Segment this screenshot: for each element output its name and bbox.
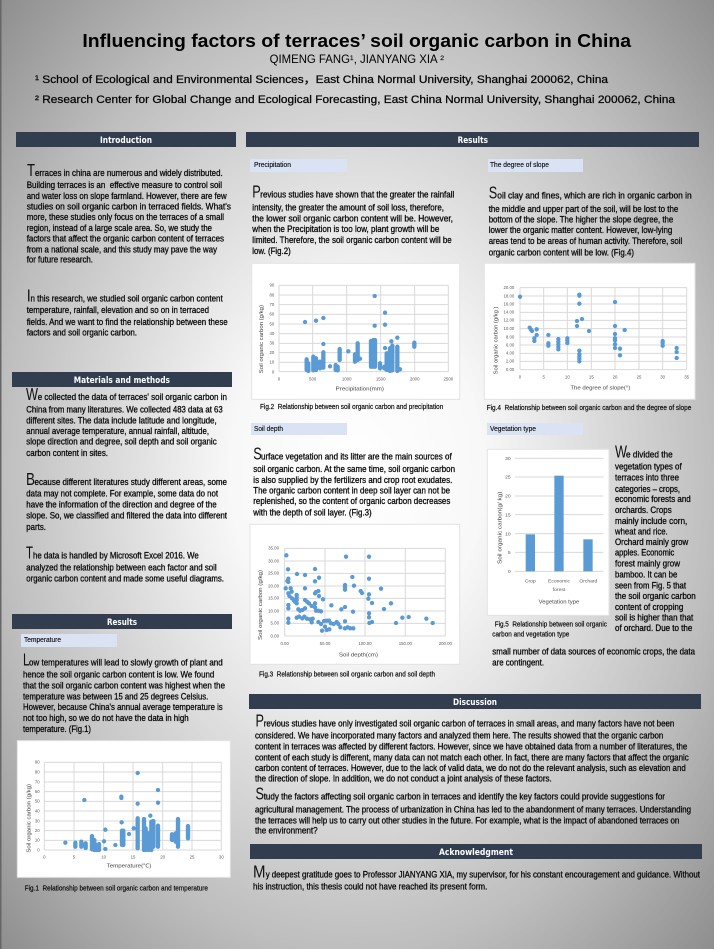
chart: scatter of soil organic carbon vs precipitation: 0 xyxy=(278,376,281,381)
text block: introduction paragraph 1: more, these studies only focus on the terraces of a small xyxy=(27,212,224,222)
chart: scatter of soil organic carbon vs precipitation: 500 xyxy=(309,376,317,381)
text block: methods paragraph 1: e collected the data of terraces' soil organic carbon in xyxy=(38,392,227,402)
chart: scatter of soil organic carbon vs precipitation: 60 xyxy=(270,312,275,317)
text block: degree of slope: the middle and upper part of the soil, will be lost to the xyxy=(489,204,678,214)
text block: vegetation type: economic forests and xyxy=(615,494,691,504)
bar: orchard xyxy=(583,539,593,571)
text block: discussion paragraph 1: considered. We have incorporated many factors and analyzed them here. The results showed that the organic carbon xyxy=(255,731,663,741)
text block: introduction paragraph 1: and water loss on slope farmland. However, there are few xyxy=(27,191,227,201)
text block: degree of slope: organic carbon content will be low. (Fig.4) xyxy=(489,247,634,257)
caption: figure 4: Fig.4 Relationship between soil organic carbon and the degree of slope xyxy=(487,403,691,412)
text block: vegetation type: e divided the xyxy=(626,449,673,459)
text block: methods paragraph 1: slope direction and degree, soil depth and soil organic xyxy=(26,437,217,447)
text block: precipitation: P xyxy=(252,181,261,201)
chart: scatter of soil organic carbon vs temperature: 10 xyxy=(35,838,40,843)
text block: vegetation type: are contingent. xyxy=(492,658,544,668)
chart: scatter of soil organic carbon vs temperature: 20 xyxy=(160,854,166,859)
panel: precipitation xyxy=(250,159,460,411)
text block: vegetation type: forest mainly grow xyxy=(615,559,681,569)
text block: vegetation type xyxy=(492,441,696,668)
subheading: precipitation: Precipitation xyxy=(254,162,291,169)
chart: scatter of soil organic carbon vs soil depth: 50.00 xyxy=(320,641,331,646)
text block: temperature xyxy=(23,650,225,734)
text block: methods paragraph 3: T xyxy=(26,542,33,562)
chart: scatter of soil organic carbon vs temperature: 25 xyxy=(190,854,195,859)
text block: degree of slope: oil clay and fines, which are rich in organic carbon in xyxy=(497,190,692,200)
subheading: temperature xyxy=(21,634,117,647)
chart: scatter of soil organic carbon vs temperature: 60 xyxy=(35,789,40,794)
text block: temperature: However, because China's annual average temperature is xyxy=(23,702,223,712)
text block: methods paragraph 3 xyxy=(26,542,224,584)
text block: methods paragraph 1: China from many literatures. We collected 483 data at 63 xyxy=(26,405,223,415)
bar chart: soil organic carbon by vegetation type: Crop xyxy=(525,578,536,584)
chart: scatter of soil organic carbon vs precipitation: 90 xyxy=(270,283,275,288)
chart: scatter of soil organic carbon vs slope degree: 35 xyxy=(684,375,690,380)
text block: temperature: L xyxy=(23,650,30,670)
chart: scatter of soil organic carbon vs soil depth: 0.00 xyxy=(271,633,280,638)
chart: scatter of soil organic carbon vs slope degree xyxy=(484,263,695,399)
chart: scatter of soil organic carbon vs slope degree: 8.00 xyxy=(506,334,515,339)
chart: scatter of soil organic carbon vs temperature: 40 xyxy=(35,808,40,813)
bar: economic forest xyxy=(554,476,564,571)
bar chart: soil organic carbon by vegetation type: 10 xyxy=(505,531,511,537)
text block: introduction paragraph 2 xyxy=(27,286,228,338)
text block: methods paragraph 1: annual average temperature, annual rainfall, altitude, xyxy=(26,426,209,436)
chart: scatter of soil organic carbon vs soil depth: 35.00 xyxy=(268,546,280,551)
chart: scatter of soil organic carbon vs soil depth: 100.00 xyxy=(358,641,372,646)
text block: precipitation: low. (Fig.2) xyxy=(252,246,291,256)
chart: scatter of soil organic carbon vs soil depth: 0.00 xyxy=(280,641,289,646)
subheading: soil depth: Soil depth xyxy=(254,426,283,433)
chart: scatter of soil organic carbon vs precipitation: 80 xyxy=(270,292,275,297)
text block: methods paragraph 3: he data is handled by Microsoft Excel 2016. We xyxy=(33,550,199,560)
text block: methods paragraph 2: B xyxy=(26,469,35,489)
bar chart: soil organic carbon by vegetation type: Soil organic carbon(g/ kg) xyxy=(498,491,504,564)
heading: materials and methods xyxy=(12,372,232,387)
caption: figure 5: carbon and vegetation type xyxy=(492,629,569,638)
text block: introduction paragraph 1: T xyxy=(27,160,35,180)
chart: scatter of soil organic carbon vs temperature: 0 xyxy=(43,854,46,859)
text block: vegetation type: orchards. Crops xyxy=(615,505,672,515)
text block: discussion paragraph 2: the terraces will help us to carry out other studies in the future. For example, what is the impact of abandoned terraces on xyxy=(255,816,679,826)
text block: vegetation type: content of cropping xyxy=(615,602,683,612)
text block: vegetation type: bamboo. It can be xyxy=(615,570,677,580)
chart: scatter of soil organic carbon vs soil depth: 5.00 xyxy=(271,621,280,626)
text block: introduction paragraph 1: erraces in china are numerous and widely distributed. xyxy=(35,168,223,178)
subheading: vegetation type xyxy=(487,423,583,435)
text block: methods paragraph 2: have the information of the direction and degree of the xyxy=(26,500,217,510)
heading: results: Results xyxy=(107,618,137,628)
heading: materials and methods: Materials and methods xyxy=(74,376,170,386)
chart: scatter of soil organic carbon vs temperature xyxy=(17,741,230,877)
authors: QIMENG FANG¹, JIANYANG XIA ² xyxy=(270,54,444,66)
chart: scatter of soil organic carbon vs precipitation: 40 xyxy=(270,331,275,336)
chart: scatter of soil organic carbon vs temperature: 20 xyxy=(35,828,40,833)
text block: precipitation: limited. Therefore, the soil organic carbon content will be xyxy=(252,235,452,245)
chart: scatter of soil organic carbon vs slope degree: 2.00 xyxy=(506,359,515,364)
text block: temperature: temperature was between 15 and 25 degrees Celsius. xyxy=(23,691,208,701)
subheading: soil depth xyxy=(251,423,347,435)
text block: introduction paragraph 2: factors and soil organic carbon. xyxy=(27,328,137,338)
text block: methods paragraph 3: analyzed the relationship between each factor and soil xyxy=(26,563,217,573)
chart: scatter of soil organic carbon vs soil depth: 150.00 xyxy=(399,641,413,646)
heading: introduction xyxy=(16,132,236,147)
text block: soil depth: S xyxy=(253,443,262,463)
text block: vegetation type: terraces into three xyxy=(615,473,679,483)
subheading: vegetation type: Vegetation type xyxy=(490,426,536,433)
bar chart: soil organic carbon by vegetation type: 30 xyxy=(505,456,511,462)
text block: vegetation type: vegetation types of xyxy=(615,462,682,472)
affiliation 2: ² Research Center for Global Change and Ecological Forecasting, East China Normal University, Shanghai 200062, China xyxy=(35,94,676,106)
chart: scatter of soil organic carbon vs precipitation: Precipitation(mm) xyxy=(336,386,384,392)
heading: discussion xyxy=(249,694,701,709)
chart: scatter of soil organic carbon vs soil depth: 200.00 xyxy=(439,641,453,646)
chart: scatter of soil organic carbon vs precipitation: 50 xyxy=(270,321,275,326)
chart: scatter of soil organic carbon vs precipitation: 10 xyxy=(270,360,275,365)
chart: scatter of soil organic carbon vs slope degree: 14.00 xyxy=(503,310,515,315)
chart: scatter of soil organic carbon vs slope degree: 4.00 xyxy=(506,351,515,356)
text block: vegetation type: soil is higher than that xyxy=(615,613,694,623)
chart: scatter of soil organic carbon vs soil depth: 30.00 xyxy=(268,558,280,563)
chart: scatter of soil organic carbon vs precipitation: 30 xyxy=(270,341,275,346)
chart: scatter of soil organic carbon vs temperature: 10 xyxy=(101,854,107,859)
chart: scatter of soil organic carbon vs temperature: 50 xyxy=(35,799,40,804)
heading: introduction: Introduction xyxy=(100,136,152,146)
text block: introduction paragraph 1: from a national scale, and this study may pave the way xyxy=(27,245,218,255)
text block: methods paragraph 3: organic carbon content and made some useful diagrams. xyxy=(26,574,224,584)
chart: scatter of soil organic carbon vs slope degree: 20 xyxy=(613,375,618,380)
chart: scatter of soil organic carbon vs temperature: 15 xyxy=(131,854,136,859)
text block: methods paragraph 2: data may not complete. For example, some data do not xyxy=(26,489,218,499)
chart: scatter of soil organic carbon vs soil depth: 10.00 xyxy=(268,608,280,613)
heading: acknowledgment xyxy=(250,844,702,859)
text block: discussion paragraph 1: revious studies have only investigated soil organic carbon of terraces in small areas, and many factors have not been xyxy=(264,719,674,729)
chart: scatter of soil organic carbon vs temperature: 0 xyxy=(37,847,40,852)
caption: figure 2: Fig.2 Relationship between soil organic carbon and precipitation xyxy=(260,402,443,411)
text block: degree of slope: lower the organic matter content. However, low-lying xyxy=(489,225,672,235)
subheading: degree of slope xyxy=(488,159,583,172)
text block: discussion paragraph 2: tudy the factors affecting soil organic carbon in terraces and identify the key factors could provide suggestions for xyxy=(264,792,665,802)
text block: methods paragraph 1: carbon content in sites. xyxy=(26,448,108,458)
chart: scatter of soil organic carbon vs slope degree: 30 xyxy=(660,375,666,380)
caption: figure 5: Fig.5 Relationship between soil organic xyxy=(495,620,607,629)
chart: scatter of soil organic carbon vs precipitation: 70 xyxy=(270,302,275,307)
text block: introduction paragraph 2: fields. And we want to find the relationship between these xyxy=(27,317,228,327)
chart: scatter of soil organic carbon vs precipitation: 2500 xyxy=(444,376,454,381)
chart: scatter of soil organic carbon vs temperature: 5 xyxy=(73,854,76,859)
text block: vegetation type: the soil organic carbon xyxy=(615,591,696,601)
chart: scatter of soil organic carbon vs temperature: Temperature(℃) xyxy=(107,862,152,869)
text block: methods paragraph 2: parts. xyxy=(26,522,46,532)
chart: scatter of soil organic carbon vs soil depth: Soil organic carbon (g/kg) xyxy=(258,570,264,640)
bar chart: soil organic carbon by vegetation type: 25 xyxy=(505,475,511,481)
chart: scatter of soil organic carbon vs slope degree: The degree of slope(°) xyxy=(570,385,631,391)
chart: scatter of soil organic carbon vs precipitation: 0 xyxy=(272,369,275,374)
chart: scatter of soil organic carbon vs soil depth: Soil depth(cm) xyxy=(339,652,378,658)
text block: acknowledgment xyxy=(253,862,700,892)
chart: scatter of soil organic carbon vs precipitation: 2000 xyxy=(410,376,420,381)
chart: scatter of soil organic carbon vs soil depth: 25.00 xyxy=(268,571,280,576)
affiliation 1: ¹ School of Ecological and Environmental Sciences，East China Normal University, Shanghai 200062, China xyxy=(35,74,609,86)
text block: discussion paragraph 1: the direction of slope. In addition, we do not conduct a joint analysis of these factors. xyxy=(255,774,552,784)
bar chart: soil organic carbon by vegetation type: Orchard xyxy=(579,578,598,584)
text block: temperature: hence the soil organic carbon content is low. We found xyxy=(23,670,214,680)
bar chart: soil organic carbon by vegetation type: Economic xyxy=(548,578,570,584)
text block: degree of slope: bottom of the slope. The higher the slope degree, the xyxy=(489,215,673,225)
text block: vegetation type: Orchard mainly grow xyxy=(615,537,689,547)
chart: scatter of soil organic carbon vs soil depth: 15.00 xyxy=(268,596,280,601)
text block: vegetation type: small number of data sources of economic crops, the data xyxy=(492,647,695,657)
text block: temperature: that the soil organic carbon content was highest when the xyxy=(23,680,225,690)
bar chart: soil organic carbon by vegetation type: 20 xyxy=(505,494,511,500)
text block: precipitation: intensity, the greater the amount of soil loss, therefore, xyxy=(252,202,444,212)
text block: soil depth xyxy=(252,443,455,517)
panel: vegetation type xyxy=(487,423,696,668)
text block: degree of slope: S xyxy=(489,182,497,202)
bar chart: soil organic carbon by vegetation type: Vegetation type xyxy=(539,599,579,605)
heading: results xyxy=(12,614,232,629)
heading: results main xyxy=(246,132,699,147)
text block: introduction paragraph 1 xyxy=(27,160,232,265)
text block: vegetation type: of orchard. Due to the xyxy=(615,623,692,633)
chart: scatter of soil organic carbon vs temperature: Soil organic carbon (g/kg) xyxy=(26,784,32,853)
subheading: degree of slope: The degree of slope xyxy=(490,162,549,169)
text block: vegetation type: mainly include corn, xyxy=(615,516,687,526)
panel: introduction xyxy=(16,132,236,338)
panel: degree of slope xyxy=(484,159,695,412)
chart: scatter of soil organic carbon vs temperature: 30 xyxy=(35,818,40,823)
text block: soil depth: with the depth of soil layer. (Fig.3) xyxy=(252,507,372,517)
text block: soil depth: replenished, so the content of organic carbon decreases xyxy=(253,496,451,506)
text block: precipitation: the lower soil organic carbon content will be. However, xyxy=(252,213,453,223)
chart: scatter of soil organic carbon vs slope degree: 25 xyxy=(637,375,642,380)
text block: vegetation type: wheat and rice. xyxy=(614,526,668,536)
chart: scatter of soil organic carbon vs slope degree: 16.00 xyxy=(503,301,515,306)
chart: scatter of soil organic carbon vs precipitation xyxy=(252,263,460,399)
chart: scatter of soil organic carbon vs precipitation: 1500 xyxy=(376,376,386,381)
text block: methods paragraph 1: different sites. The data include latitude and longitude, xyxy=(26,415,217,425)
heading: discussion: Discussion xyxy=(453,698,497,708)
subheading: temperature: Temperature xyxy=(24,637,61,644)
bar chart: soil organic carbon by vegetation type xyxy=(487,449,609,615)
panel: materials and methods xyxy=(12,372,232,584)
text block: soil depth: is also supplied by the fertilizers and crop root exudates. xyxy=(253,475,452,485)
chart: scatter of soil organic carbon vs temperature: 80 xyxy=(35,769,40,774)
text block: soil depth: urface vegetation and its litter are the main sources of xyxy=(261,451,452,461)
text block: methods paragraph 1: W xyxy=(26,384,38,404)
chart: scatter of soil organic carbon vs slope degree: Soil organic carbon (g/kg ) xyxy=(493,306,499,374)
chart: scatter of soil organic carbon vs temperature: 30 xyxy=(219,854,224,859)
text block: vegetation type: seen from Fig. 5 that xyxy=(615,580,686,590)
text block: precipitation xyxy=(251,181,454,256)
text block: introduction paragraph 1: Building terraces is an effective measure to control soil xyxy=(27,180,222,190)
subheading: precipitation xyxy=(250,159,347,172)
chart: scatter of soil organic carbon vs slope degree: 6.00 xyxy=(506,342,515,347)
chart: scatter of soil organic carbon vs slope degree: 15 xyxy=(589,375,594,380)
text block: introduction paragraph 1: region, instead of a large scale area. So, we study the xyxy=(27,223,212,233)
bar chart: soil organic carbon by vegetation type: 0 xyxy=(508,569,511,575)
text block: degree of slope: areas tend to be areas of human activity. Therefore, soil xyxy=(489,236,682,246)
text block: discussion paragraph 1: P xyxy=(256,711,264,731)
text block: temperature: not too high, so we do not have the data in high xyxy=(23,713,189,723)
text block: methods paragraph 2: slope. So, we classified and filtered the data into different xyxy=(26,511,227,521)
caption: figure 3: Fig.3 Relationship between soil organic carbon and soil depth xyxy=(259,670,435,679)
chart: scatter of soil organic carbon vs slope degree: 5 xyxy=(542,375,545,380)
text block: soil depth: The organic carbon content in deep soil layer can not be xyxy=(253,486,450,496)
text block: temperature: ow temperatures will lead to slowly growth of plant and xyxy=(29,658,223,668)
text block: soil depth: soil organic carbon. At the same time, soil organic carbon xyxy=(253,464,455,474)
text block: acknowledgment: his instruction, this thesis could not have reached its present form. xyxy=(253,882,487,892)
panel: results left, temperature xyxy=(12,614,232,893)
text block: introduction paragraph 1: factors that affect the organic carbon content of terraces xyxy=(27,234,225,244)
caption: figure 1: Fig.1 Relationship between soil organic carbon and temperature xyxy=(25,884,208,893)
text block: acknowledgment: M xyxy=(253,862,266,882)
text block: vegetation type: categories – crops, xyxy=(615,484,680,494)
text block: introduction paragraph 2: I xyxy=(27,286,31,306)
chart: scatter of soil organic carbon vs slope degree: 0.00 xyxy=(506,367,515,372)
text block: discussion paragraph 2: S xyxy=(256,784,264,804)
chart: scatter of soil organic carbon vs temperature: 90 xyxy=(35,760,40,765)
chart: scatter of soil organic carbon vs precipitation: 1000 xyxy=(342,376,352,381)
text block: introduction paragraph 1: for future research. xyxy=(27,255,93,265)
text block: vegetation type: W xyxy=(615,441,627,461)
text block: precipitation: when the Precipitation is too low, plant growth will be xyxy=(251,224,439,234)
chart: scatter of soil organic carbon vs soil depth xyxy=(250,524,460,664)
panel: acknowledgment xyxy=(250,844,702,892)
text block: vegetation type: apples. Economic xyxy=(615,547,675,557)
text block: introduction paragraph 2: temperature, rainfall, elevation and so on in terraced xyxy=(27,305,209,315)
text block: methods paragraph 2: ecause different literatures study different areas, some xyxy=(34,477,227,487)
caption: figure 5 xyxy=(492,620,607,638)
chart: scatter of soil organic carbon vs slope degree: 18.00 xyxy=(503,293,515,298)
text block: discussion paragraph 2 xyxy=(255,784,691,836)
text block: temperature: temperature. (Fig.1) xyxy=(23,724,91,734)
heading: results main: Results xyxy=(458,136,488,146)
panel: discussion xyxy=(249,694,701,836)
text block: precipitation: revious studies have shown that the greater the rainfall xyxy=(260,189,454,199)
bar chart: soil organic carbon by vegetation type: 15 xyxy=(505,512,511,518)
text block: discussion paragraph 1 xyxy=(255,711,689,784)
chart: scatter of soil organic carbon vs slope degree: 12.00 xyxy=(503,318,515,323)
text block: methods paragraph 1 xyxy=(26,384,227,458)
heading: acknowledgment: Acknowledgment xyxy=(439,848,513,858)
chart: scatter of soil organic carbon vs precipitation: 20 xyxy=(270,350,275,355)
bar chart: soil organic carbon by vegetation type: forest xyxy=(553,587,566,593)
text block: discussion paragraph 2: the environment? xyxy=(255,826,318,836)
chart: scatter of soil organic carbon vs slope degree: 10 xyxy=(565,375,570,380)
text block: degree of slope xyxy=(489,182,692,257)
chart: scatter of soil organic carbon vs slope degree: 0 xyxy=(519,375,522,380)
bar: crop xyxy=(526,534,535,571)
chart: scatter of soil organic carbon vs temperature: 70 xyxy=(35,779,40,784)
bar chart: soil organic carbon by vegetation type: 5 xyxy=(508,550,511,556)
chart: scatter of soil organic carbon vs slope degree: 20.00 xyxy=(503,285,515,290)
text block: introduction paragraph 1: studies on soil organic carbon in terraced fields. What's xyxy=(27,202,232,212)
chart: scatter of soil organic carbon vs precipitation: Soil organic carbon (g/kg) xyxy=(259,305,265,373)
chart: scatter of soil organic carbon vs soil depth: 20.00 xyxy=(268,583,280,588)
chart: scatter of soil organic carbon vs slope degree: 10.00 xyxy=(503,326,515,331)
title: Influencing factors of terraces’ soil organic carbon in China xyxy=(82,30,632,51)
text block: methods paragraph 2 xyxy=(26,469,227,532)
panel: soil depth xyxy=(250,423,460,679)
text block: introduction paragraph 2: n this research, we studied soil organic carbon content xyxy=(30,294,223,304)
